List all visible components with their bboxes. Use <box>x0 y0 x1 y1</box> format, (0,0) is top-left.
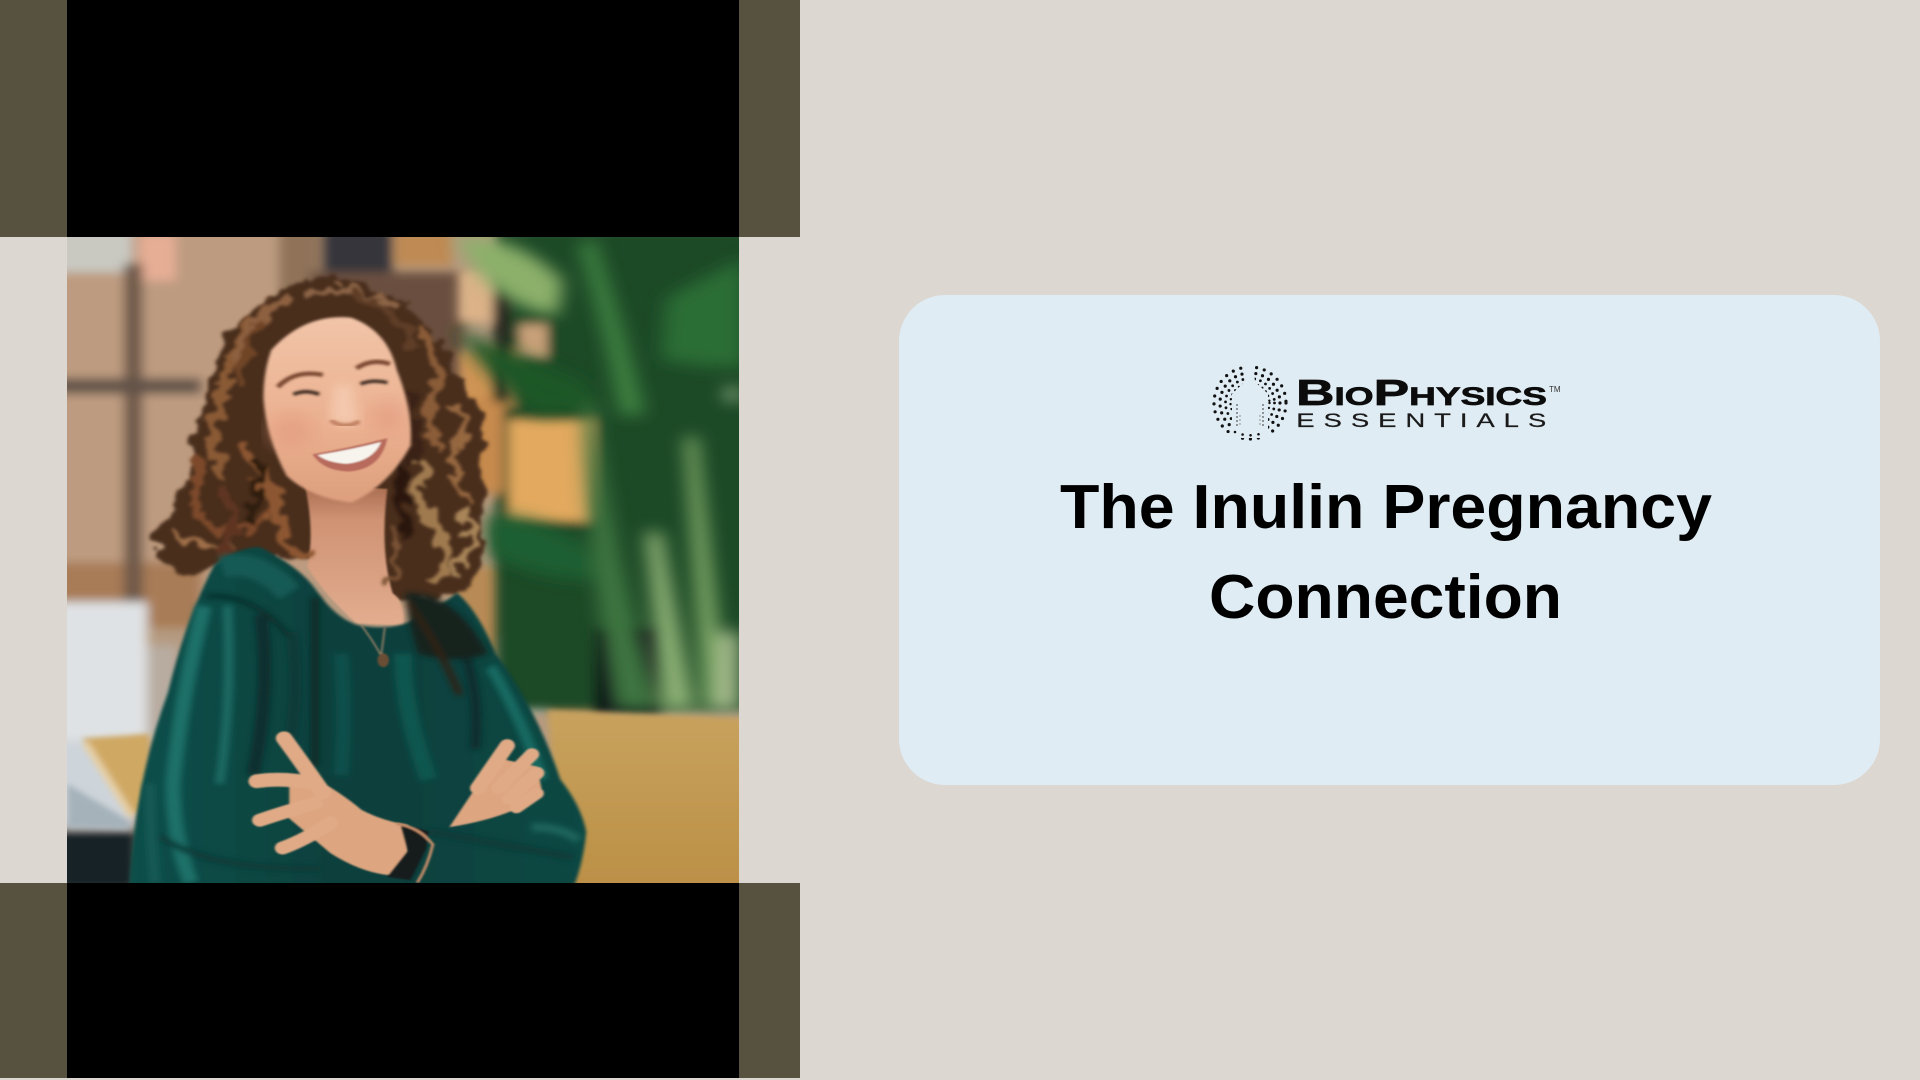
woman: hair curls highlights <box>176 291 471 584</box>
woman: necklace <box>362 626 389 667</box>
olive band bottom left <box>0 883 800 1078</box>
olive band top left <box>0 0 800 237</box>
woman <box>129 277 586 888</box>
woman: crossed arms and hands <box>257 738 542 876</box>
woman: face <box>263 317 411 503</box>
logo trademark: TM <box>1549 385 1561 394</box>
icon: dotted circle with body silhouette <box>1214 362 1286 439</box>
woman: hair back <box>154 277 484 602</box>
title <box>1060 473 1713 632</box>
woman: dark hair over shoulder <box>405 593 488 695</box>
table top <box>67 710 754 897</box>
plant: blurred green leaves <box>455 229 754 714</box>
photo: smiling woman in green blouse with crossed arms <box>67 237 739 883</box>
logo wordmark: Essentials: ESSENTIALS <box>1296 411 1546 432</box>
black bar bottom <box>67 883 739 1078</box>
logo wordmark: BioPhysics: B IO P HYSICS <box>1296 372 1547 413</box>
photo background: blurred cafe interior <box>52 220 754 897</box>
woman: wrist watch <box>387 823 433 883</box>
woman: green blouse <box>129 547 586 888</box>
panel: title card <box>899 295 1880 785</box>
logo: BioPhysics Essentials <box>1212 366 1561 441</box>
black bar top <box>67 0 739 237</box>
woman: neck <box>305 485 404 626</box>
title line 1: The Inulin Pregnancy <box>1060 473 1713 542</box>
title line 2: Connection <box>1209 563 1562 632</box>
